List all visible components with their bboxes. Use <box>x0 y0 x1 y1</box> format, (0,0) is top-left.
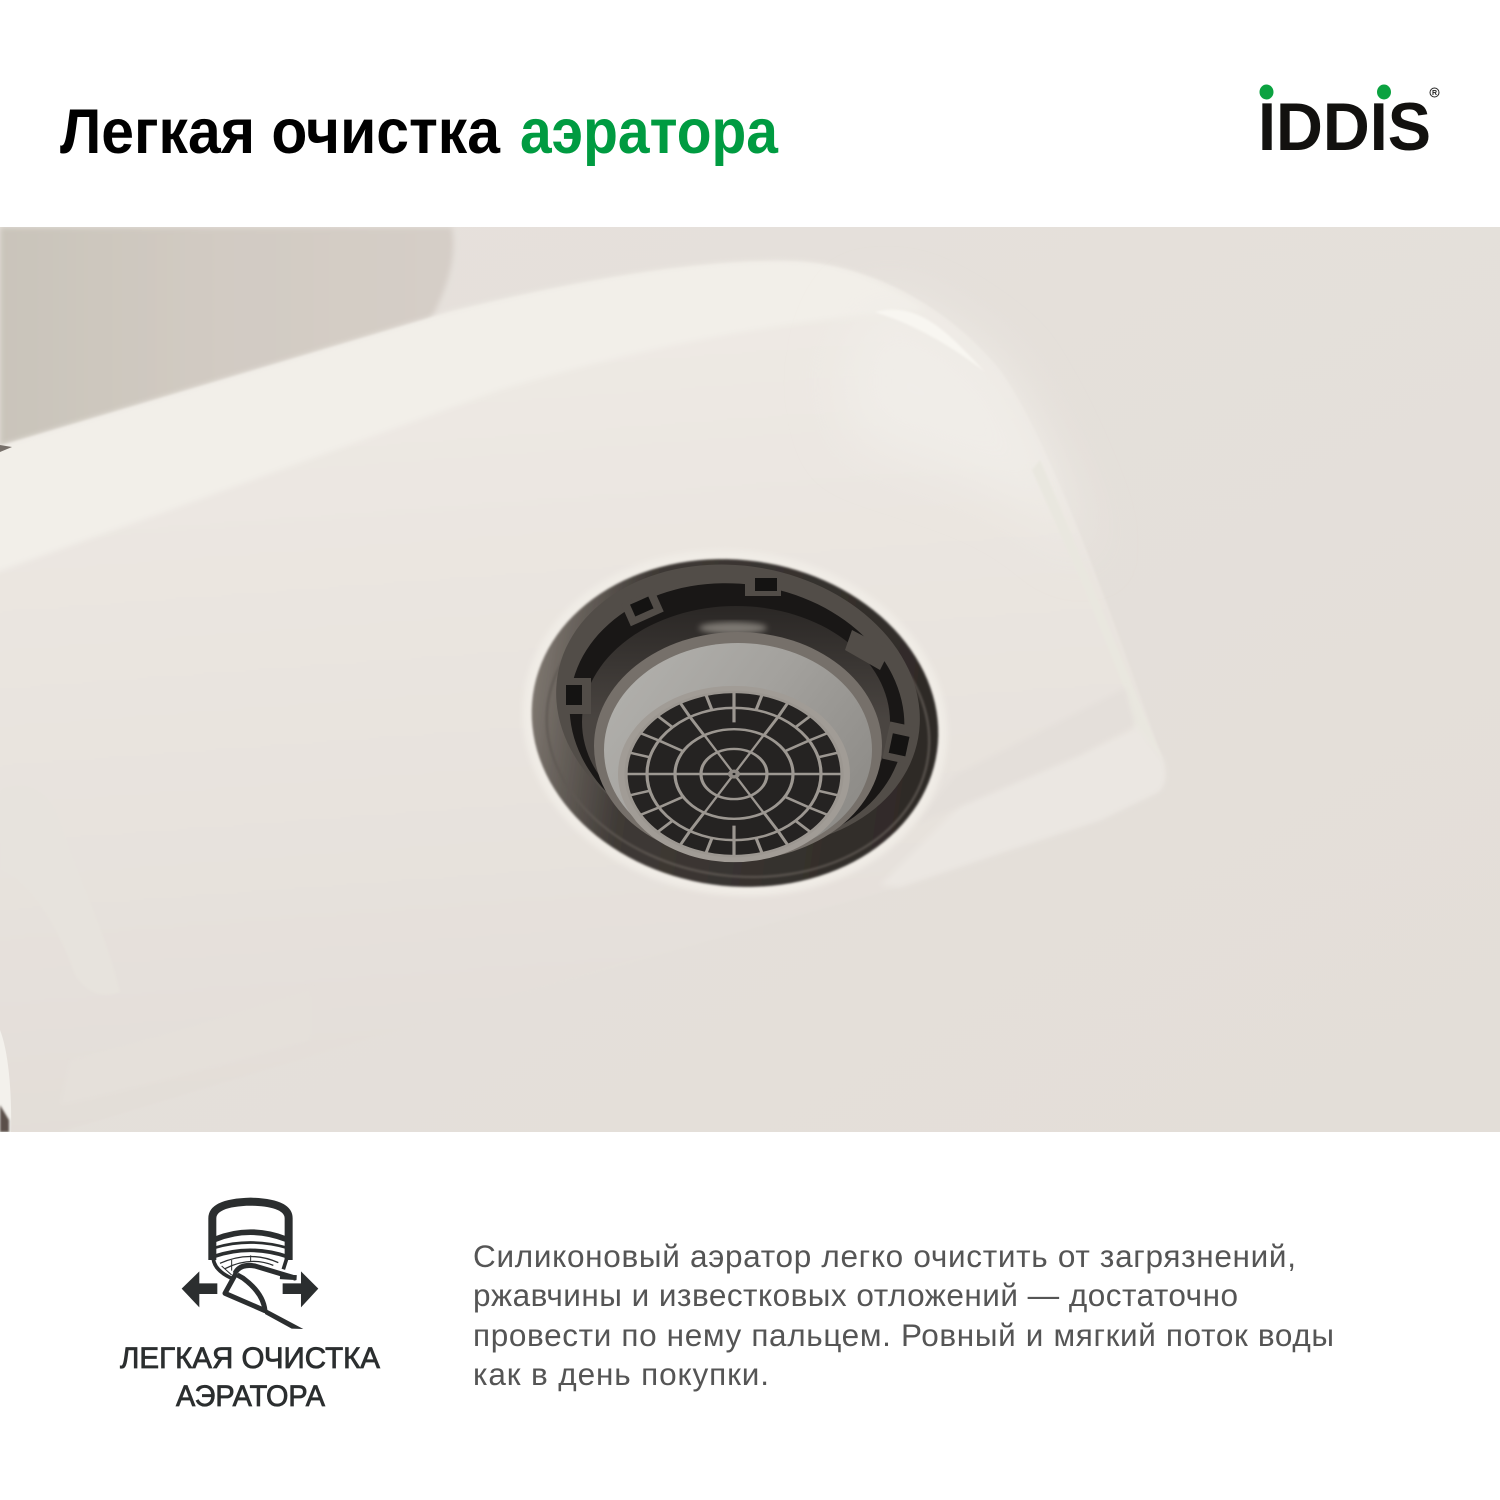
icon: finger <box>225 1264 293 1311</box>
icon label: ЛЕГКАЯ ОЧИСТКА <box>120 1342 380 1375</box>
background: darker basin shape upper left <box>0 227 454 445</box>
faucet upper right bright area <box>843 300 1090 560</box>
housing ring <box>556 564 920 834</box>
rim inner lip <box>546 666 932 879</box>
faucet right edge band <box>1032 460 1163 760</box>
photo: faucet spout with aerator <box>0 227 1500 1132</box>
icon: wrist line <box>265 1309 303 1329</box>
faucet top highlight band <box>0 316 432 566</box>
icon: left arrow <box>182 1271 217 1307</box>
left edge white and dark slivers <box>0 1030 11 1132</box>
icon label: АЭРАТОРА <box>176 1380 325 1413</box>
title: аэратора <box>520 97 779 167</box>
description text: как в день покупки. <box>473 1356 769 1392</box>
mesh rings and spokes <box>626 692 842 856</box>
dome inner shoulder <box>582 606 890 774</box>
faucet lower right grey band <box>915 688 1135 825</box>
grey dome <box>604 643 872 857</box>
icon: aerator cleaning with finger and arrows <box>182 1202 318 1329</box>
aerator outer rim <box>530 557 940 889</box>
description text: ржавчины и известковых отложений — достаточно <box>473 1277 1238 1313</box>
faucet left highlight <box>0 785 120 995</box>
aerator <box>528 558 944 894</box>
description text: Силиконовый аэратор легко очистить от загрязнений, <box>473 1238 1296 1274</box>
faucet lower right light band <box>880 722 1165 887</box>
icon: aerator body outline <box>212 1202 289 1260</box>
faucet spout body <box>3 320 837 446</box>
icon label <box>120 1342 380 1413</box>
notch tabs <box>563 574 918 764</box>
description text: провести по нему пальцем. Ровный и мягкий поток воды <box>473 1317 1334 1353</box>
aerator halo <box>528 696 944 894</box>
dark cavity <box>570 583 904 825</box>
title: Легкая очистка <box>60 97 501 167</box>
mesh openings <box>626 692 842 856</box>
title <box>60 97 779 167</box>
grey dome ring <box>594 632 882 860</box>
faucet lower left band <box>60 990 310 1105</box>
icon: right arrow <box>283 1271 318 1307</box>
faucet glossy highlight <box>882 311 974 362</box>
mesh rim <box>618 686 850 862</box>
logo: IDDIS: R <box>1432 90 1437 97</box>
icon: aerator mesh <box>213 1250 287 1278</box>
icon: aerator bands <box>215 1232 287 1239</box>
top reflection <box>699 622 767 634</box>
mesh face <box>618 686 850 862</box>
logo: IDDIS: IDDIS <box>1258 89 1431 165</box>
description text <box>473 1238 1334 1392</box>
